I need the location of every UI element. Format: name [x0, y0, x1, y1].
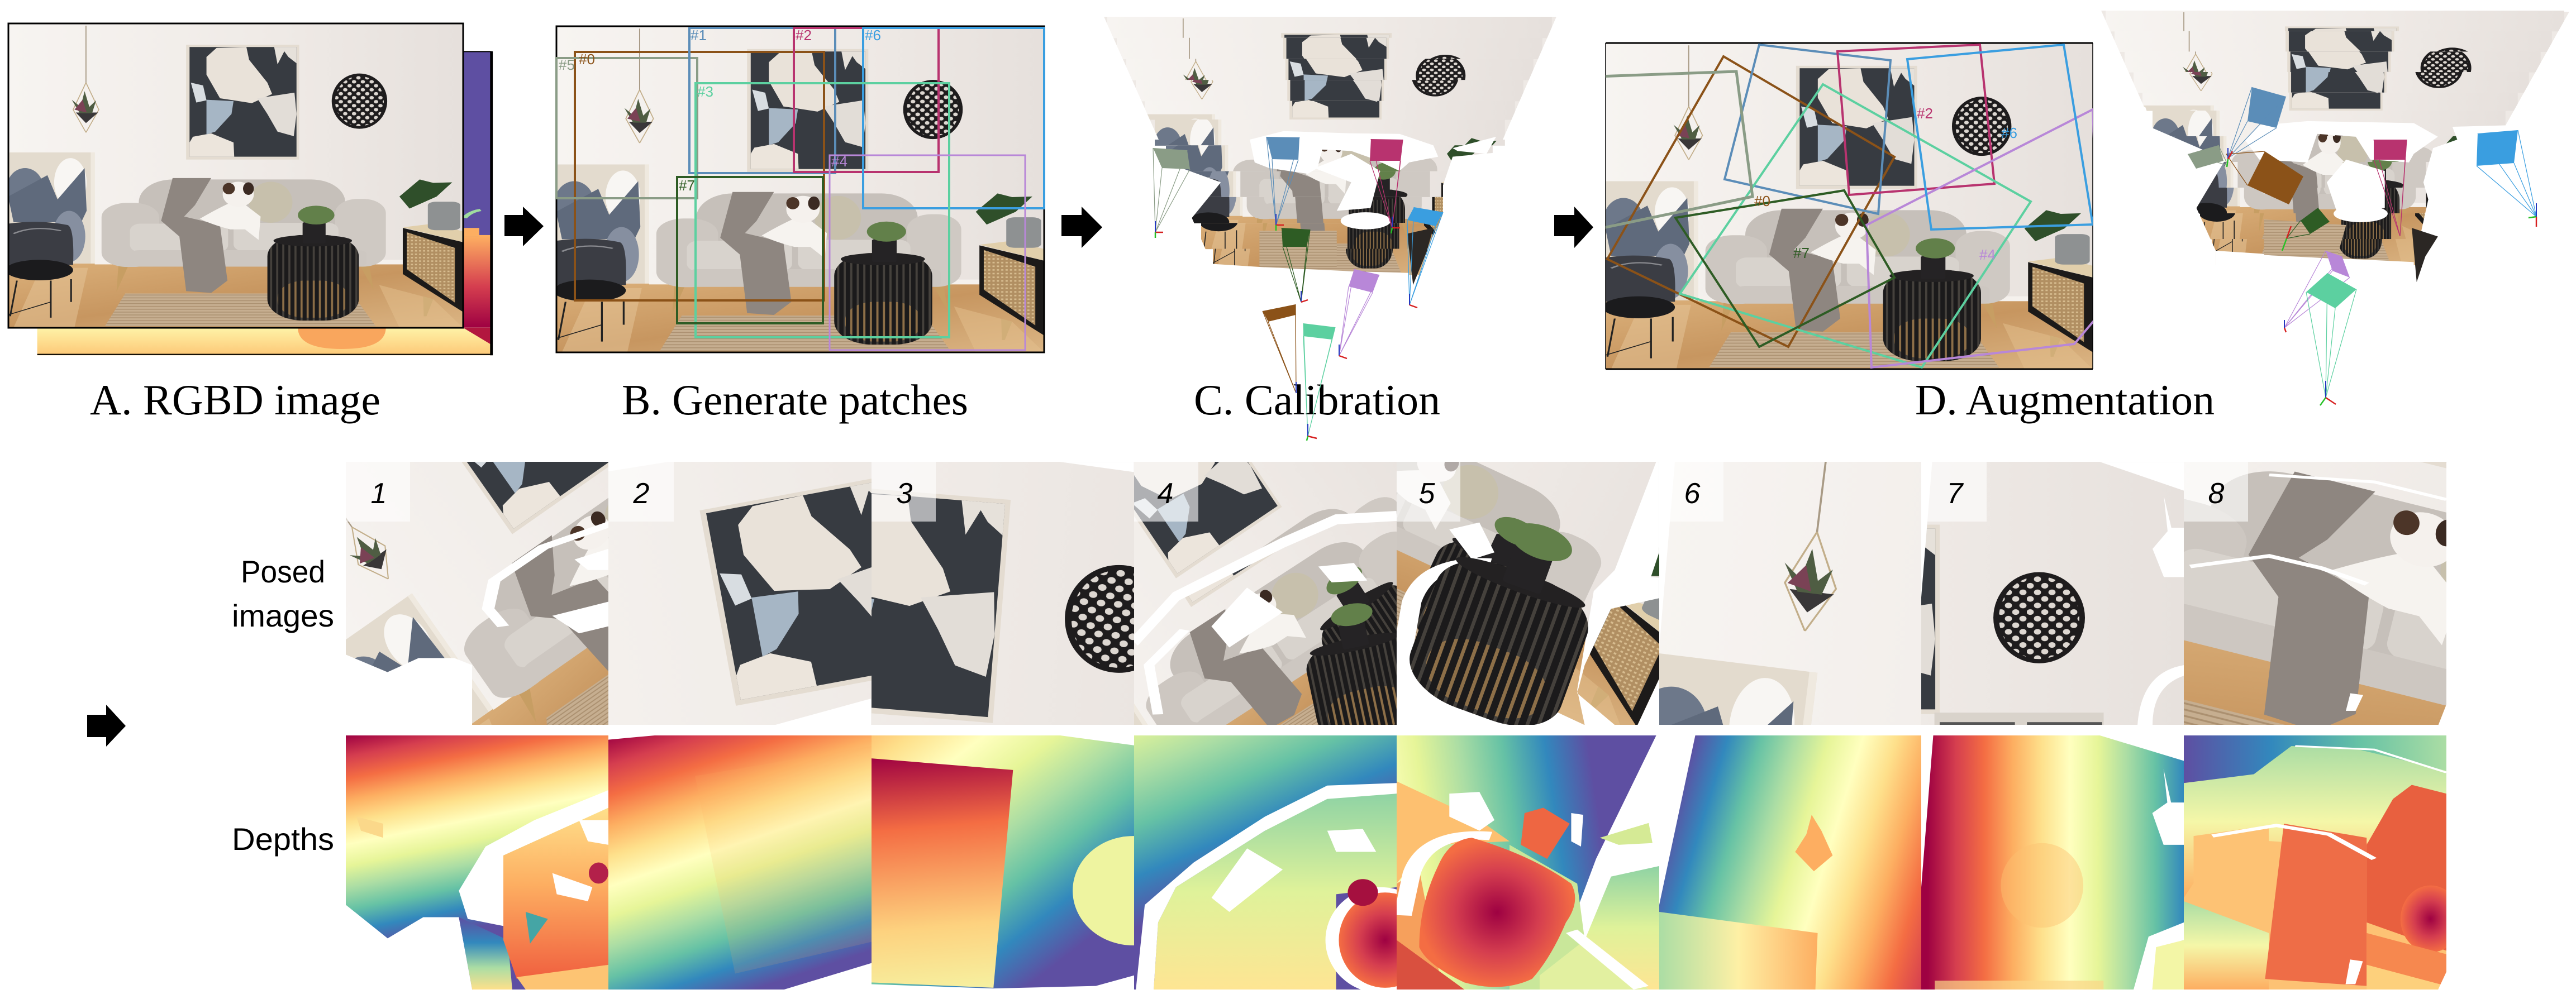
row label: posed images: Posed	[241, 554, 325, 589]
depth map 3	[872, 735, 1134, 988]
panel A: RGB room photo	[6, 23, 463, 328]
depth map 7	[1921, 735, 2184, 990]
posed image 5: 5	[1419, 477, 1436, 510]
panel B: room with generated patches: #2	[796, 27, 812, 44]
posed image 8	[2184, 462, 2446, 725]
posed image 3	[872, 462, 1134, 725]
depth map 8	[2184, 735, 2446, 990]
panel B: room with generated patches: #1	[691, 27, 707, 44]
panel D: augmented patches on room photo	[1598, 43, 2101, 369]
camera patches for panel D	[2188, 87, 2536, 405]
posed image 6: 6	[1684, 477, 1701, 510]
camera patches for panel C	[1153, 137, 1443, 441]
caption C: C. Calibration	[1194, 376, 1440, 424]
depth map 4	[1134, 735, 1397, 990]
panel B: room with generated patches: #5	[559, 56, 575, 73]
posed image 7: 7	[1947, 477, 1964, 510]
arrow to result rows	[87, 705, 126, 747]
arrow C to D	[1554, 207, 1593, 248]
panel B: room with generated patches: #6	[865, 27, 881, 44]
posed image 2: 2	[633, 477, 650, 510]
panel D: augmented patches on room photo: #2	[1917, 105, 1933, 122]
posed image 5	[1397, 462, 1659, 725]
posed image 7	[1921, 462, 2184, 725]
panel B: room with generated patches: #3	[697, 83, 713, 100]
row label: depths: Depths	[232, 821, 334, 857]
depth map 6	[1659, 735, 1921, 990]
panel B: room with generated patches: #0	[579, 51, 595, 68]
panel D: augmented patches on room photo: #0	[1754, 193, 1770, 209]
panel B: room with generated patches: #7	[679, 177, 695, 194]
row label: posed images	[232, 554, 334, 633]
depth map 5	[1397, 735, 1659, 990]
row label: posed images: images	[232, 598, 334, 633]
panel B: room with generated patches: #4	[831, 153, 847, 170]
posed image 1	[346, 462, 608, 725]
panel D: augmented patches on room photo: #4	[1979, 246, 1996, 263]
posed image 8: 8	[2208, 477, 2225, 510]
panel D: augmented patches on room photo: #6	[2001, 125, 2017, 141]
posed image 4: 4	[1158, 477, 1173, 510]
caption A: A. RGBD image	[90, 376, 380, 424]
panel C: calibrated point cloud view	[1064, 0, 1598, 285]
posed image 6	[1659, 462, 1921, 725]
caption D: D. Augmentation	[1915, 376, 2215, 424]
panel B: room with generated patches	[553, 26, 1044, 352]
posed image 3: 3	[897, 477, 913, 510]
panel D: augmented patches on room photo: #7	[1793, 245, 1810, 261]
depth map 2	[608, 735, 872, 990]
caption B: B. Generate patches	[622, 376, 968, 424]
posed image 1: 1	[371, 477, 387, 510]
depth map layer of RGBD image	[37, 51, 492, 355]
posed image 4	[1134, 462, 1397, 725]
posed image 2	[608, 462, 872, 725]
depth map 1	[346, 735, 608, 990]
arrow A to B	[504, 207, 544, 246]
panel D: augmented point cloud view	[2095, 0, 2576, 285]
arrow B to C	[1061, 207, 1102, 248]
